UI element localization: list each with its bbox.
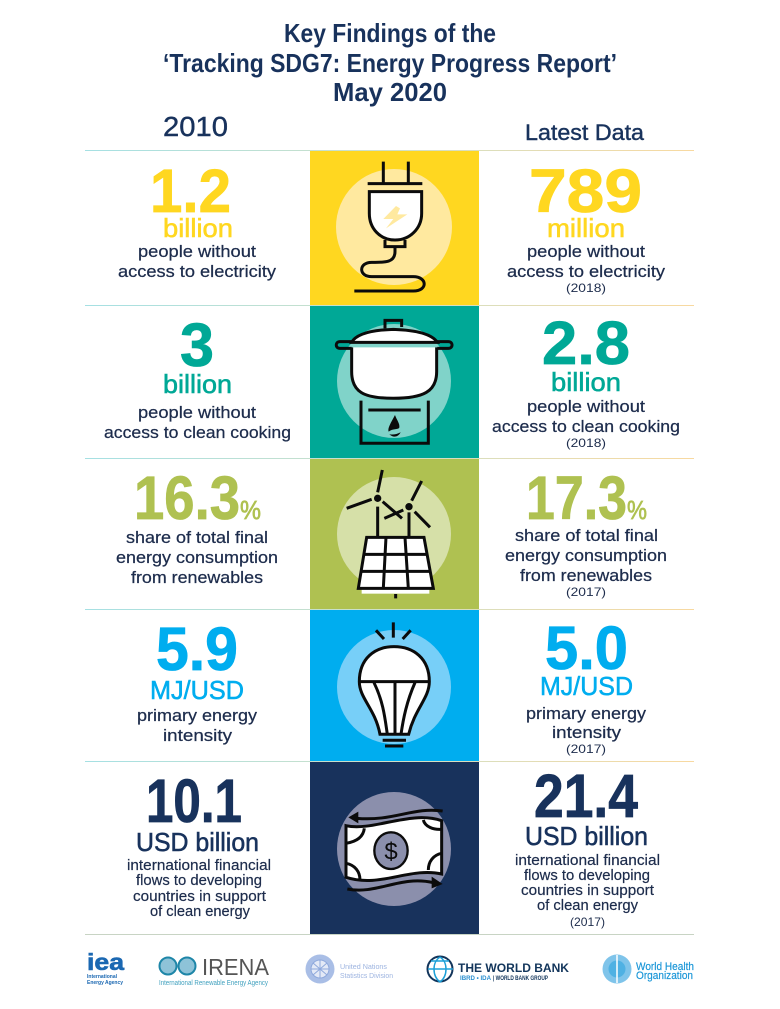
stat: intensity 2010: intensity — [163, 726, 233, 745]
stat: renewables latest: from renewables — [520, 566, 652, 585]
logo: World Bank: IBRD • IDA — [460, 976, 492, 982]
stat: cooking 2010: people without — [138, 403, 256, 422]
stat: renewables latest — [505, 464, 667, 599]
stat: electricity latest: million — [547, 213, 625, 243]
stat: electricity 2010 — [118, 157, 277, 281]
logo: IEA — [87, 949, 124, 986]
stat: renewables latest: energy consumption — [505, 546, 667, 565]
stat: renewables 2010: from renewables — [131, 568, 263, 587]
plug drawing — [354, 162, 424, 291]
stat: intensity 2010: primary energy — [137, 706, 258, 725]
stat: renewables latest: share of total final — [515, 526, 658, 545]
stat: electricity latest: 789 — [529, 157, 642, 225]
logo: WHO: World Health — [636, 961, 694, 973]
panel: finance icon — [310, 761, 479, 934]
stat: renewables latest: % — [627, 495, 647, 525]
stat: cooking 2010: access to clean cooking — [104, 423, 291, 442]
stat: renewables 2010 — [116, 464, 278, 587]
stat: renewables latest: 17.3 — [526, 464, 627, 532]
stat: renewables 2010: energy consumption — [116, 548, 278, 567]
logo: UN Statistics Division — [306, 954, 393, 984]
stat: electricity latest: people without — [527, 242, 645, 261]
stat: finance latest — [515, 762, 660, 929]
stat: cooking latest: billion — [551, 367, 621, 397]
stat: electricity 2010: access to electricity — [118, 262, 277, 281]
banknote drawing: $ — [384, 838, 398, 865]
stat: finance latest: USD billion — [525, 821, 648, 851]
logo: WHO: Organization — [636, 970, 693, 982]
stat: finance 2010: flows to developing — [136, 873, 262, 889]
stat: renewables latest: (2017) — [566, 585, 606, 599]
banknote drawing — [346, 810, 443, 890]
title: Key Findings of the — [284, 18, 496, 48]
panel: energy intensity icon — [310, 609, 479, 761]
row rules — [85, 150, 694, 935]
logo: WHO — [602, 954, 694, 984]
logo: World Bank: THE WORLD BANK — [458, 961, 569, 975]
stat: finance 2010: 10.1 — [146, 767, 242, 835]
stat: finance latest: (2017) — [570, 915, 605, 929]
stat: renewables 2010: share of total final — [126, 528, 268, 547]
wind turbines and solar panel drawing — [347, 470, 433, 598]
stat: cooking latest — [492, 309, 680, 450]
stat: electricity 2010: people without — [138, 242, 256, 261]
logo: World Bank: | WORLD BANK GROUP — [493, 976, 548, 982]
logo: IRENA: IRENA — [202, 954, 270, 980]
title: ‘Tracking SDG7: Energy Progress Report’ — [163, 48, 617, 78]
logo: World Bank — [428, 956, 569, 982]
panel: renewables icon — [310, 458, 479, 609]
heading: latest data: Latest Data — [525, 120, 645, 145]
stat: electricity latest — [507, 157, 666, 295]
title — [163, 18, 617, 107]
stat: electricity 2010: billion — [163, 213, 233, 243]
panel: electricity icon — [310, 150, 479, 305]
stat: renewables 2010: 16.3 — [134, 464, 240, 532]
pot drawing — [336, 320, 452, 443]
stat: intensity 2010: 5.9 — [156, 615, 238, 683]
stat: intensity latest: intensity — [552, 723, 622, 742]
logo: UN Statistics Division: United Nations — [340, 962, 387, 971]
stat: finance 2010: of clean energy — [150, 904, 251, 920]
stat: intensity latest: 5.0 — [545, 614, 628, 682]
stat: intensity 2010 — [137, 615, 258, 745]
logo: IRENA: International Renewable Energy Agency — [159, 980, 268, 987]
stat: intensity latest: (2017) — [566, 742, 606, 756]
title: May 2020 — [333, 77, 447, 107]
stat: intensity 2010: MJ/USD — [150, 675, 244, 705]
stat: cooking 2010 — [104, 311, 291, 442]
stat: finance 2010: countries in support — [133, 889, 266, 905]
stat: finance latest: countries in support — [521, 883, 654, 899]
stat: cooking 2010: billion — [163, 369, 232, 399]
stat: finance latest: flows to developing — [524, 868, 650, 884]
stat: finance latest: 21.4 — [534, 762, 638, 830]
stat: cooking latest: 2.8 — [542, 309, 630, 377]
stat: electricity latest: (2018) — [566, 281, 606, 295]
stat: finance 2010: international financial — [127, 858, 271, 874]
stat: cooking latest: (2018) — [566, 436, 606, 450]
stat: finance latest: international financial — [515, 853, 660, 869]
stat: intensity latest: primary energy — [526, 704, 647, 723]
stat: electricity latest: access to electricity — [507, 262, 666, 281]
stat: electricity 2010: 1.2 — [150, 157, 231, 225]
stat: intensity latest — [526, 614, 647, 756]
light bulb drawing — [359, 622, 429, 746]
heading: 2010: 2010 — [163, 111, 228, 142]
stat: renewables 2010: % — [240, 495, 261, 525]
stat: finance latest: of clean energy — [537, 898, 639, 914]
logo: IRENA — [159, 954, 270, 987]
stat: finance 2010: USD billion — [136, 827, 259, 857]
stat: finance 2010 — [127, 767, 271, 920]
stat: cooking latest: people without — [527, 397, 645, 416]
stat: cooking 2010: 3 — [180, 311, 214, 379]
stat: intensity latest: MJ/USD — [540, 671, 633, 701]
panel: clean cooking icon — [310, 305, 479, 458]
logo: IEA: iea — [87, 949, 124, 975]
logo: IEA: Energy Agency — [87, 980, 124, 986]
logo: IEA: International — [87, 974, 117, 980]
logo: UN Statistics Division: Statistics Division — [340, 971, 393, 980]
stat: cooking latest: access to clean cooking — [492, 417, 680, 436]
